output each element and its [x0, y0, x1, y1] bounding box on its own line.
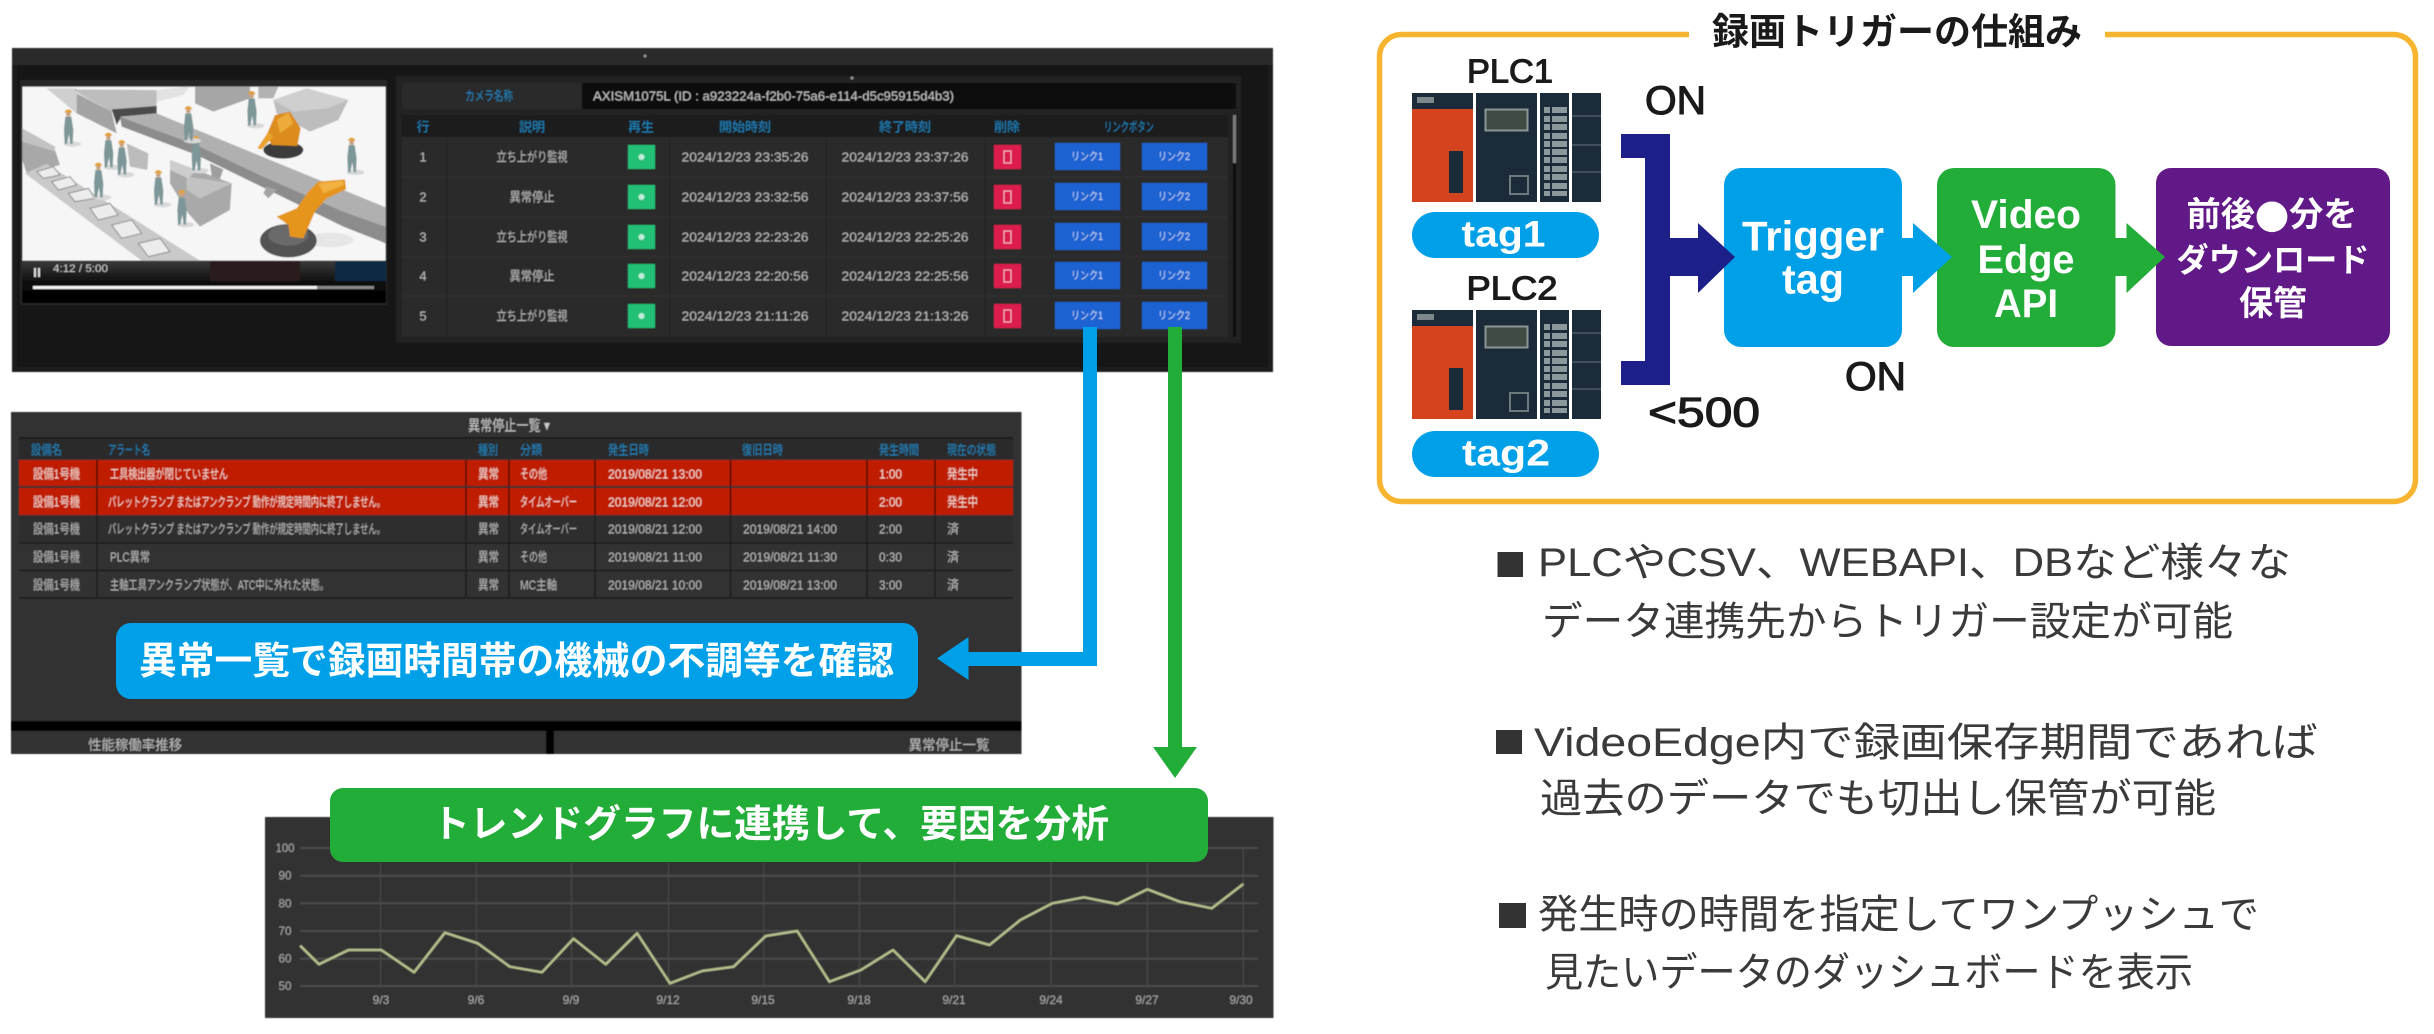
alarm row 3: 設備1号機 [33, 522, 80, 536]
alarm row 5: MC主軸 [520, 578, 557, 592]
alarm row 2: 異常 [478, 494, 499, 510]
list header row: 発生時間 [879, 442, 919, 458]
PLC1 label: PLC1 [1467, 52, 1553, 90]
row 4: 4 [419, 268, 427, 284]
x axis labels: 9/15 [751, 993, 775, 1007]
row 3 [419, 223, 1207, 250]
Trigger tag box: Trigger [1742, 212, 1884, 260]
y axis labels: 50 [278, 979, 292, 993]
alarm row 2: 2:00 [879, 494, 902, 510]
alarm row 3: 異常 [478, 522, 499, 536]
alarm row 2: タイムオーバー [520, 494, 577, 510]
y axis labels: 100 [276, 841, 295, 855]
list header row: 復旧日時 [742, 442, 783, 458]
row 3: 2024/12/23 22:25:26 [842, 230, 968, 244]
alarm row 5: 2019/08/21 13:00 [743, 578, 837, 592]
video player [20, 80, 387, 305]
list title: 異常停止一覧 ▾ [468, 418, 550, 434]
alarm row 4: 2019/08/21 11:00 [608, 550, 702, 564]
row 5: リンク1 [1071, 309, 1103, 322]
row 4: リンク1 [1071, 269, 1103, 282]
y axis labels: 70 [278, 924, 292, 938]
alarm row 3: 2:00 [879, 522, 902, 536]
x axis labels: 9/18 [847, 993, 871, 1007]
list header row [19, 439, 1013, 459]
alarm row 1: その他 [520, 466, 547, 482]
row 5: 立ち上がり監視 [496, 308, 568, 324]
alarm row 3: 2019/08/21 14:00 [743, 522, 837, 536]
alarm row 1: 工具検出器が閉じていません [110, 466, 228, 482]
alarm row 5: 主軸工具アンクランプ状態が、ATC中に外れた状態。 [110, 578, 329, 592]
alarm row 1: 異常 [478, 466, 499, 482]
y axis labels: 90 [278, 869, 292, 883]
Trigger tag box: tag [1782, 256, 1844, 302]
list header row: 設備名 [31, 442, 62, 458]
download box: 前後●分を [2186, 190, 2358, 240]
row 2: 異常停止 [510, 190, 554, 204]
panel: abnormal stop list screen [11, 412, 1022, 754]
list header row: 現在の状態 [947, 442, 996, 458]
bullet 3 [1499, 893, 2259, 995]
alarm row 3 [19, 516, 1013, 598]
alarm row 1: 設備1号機 [33, 466, 80, 482]
tag1 pill [1412, 212, 1599, 258]
x axis labels: 9/30 [1229, 993, 1253, 1007]
alarm row 5 [19, 570, 1013, 598]
x axis labels: 9/24 [1039, 993, 1063, 1007]
alarm row 4: 済 [947, 550, 959, 564]
row 2: リンク1 [1071, 190, 1103, 203]
alarm row 4: 設備1号機 [33, 550, 80, 564]
alarm row 3: パレットクランプ またはアンクランプ 動作が規定時間内に終了しません。 [108, 522, 385, 536]
row 3: リンク2 [1158, 230, 1190, 243]
bullet 1 [1498, 541, 2291, 644]
video controls [22, 261, 386, 303]
alarm row 4: 異常 [478, 550, 499, 564]
row 4: 2024/12/23 22:25:56 [842, 268, 968, 284]
row 1: リンク1 [1071, 150, 1103, 163]
row 3: リンク1 [1071, 230, 1103, 243]
download box [2156, 168, 2390, 346]
alarm row 1: 1:00 [879, 466, 902, 482]
row 1: リンク2 [1158, 150, 1190, 163]
Video Edge API box: Edge [1978, 238, 2074, 282]
alarm row 1: 発生中 [947, 466, 978, 482]
connector: green line and arrow to trend graph [1153, 327, 1197, 778]
row 4: 異常停止 [510, 268, 554, 284]
x axis labels: 9/21 [942, 993, 966, 1007]
alarm row 4 [33, 550, 959, 564]
download box: 保管 [2239, 285, 2307, 323]
bottom tabs: 性能稼働率推移 [88, 737, 182, 753]
row 5 [419, 302, 1207, 329]
list header row: 発生日時 [608, 442, 649, 458]
row 2: 2024/12/23 23:32:56 [682, 190, 808, 204]
row 1 [419, 143, 1207, 170]
table header: リンクボタン [1104, 120, 1154, 134]
ON label bottom: ON [1845, 355, 1906, 399]
alarm row 2 [19, 488, 1013, 515]
row 3: 2024/12/23 22:23:26 [682, 230, 808, 244]
alarm row 4: 0:30 [879, 550, 902, 564]
x axis labels: 9/6 [468, 993, 485, 1007]
arrow: bracket to trigger [1621, 134, 1735, 385]
video controls: 4:12 / 5:00 [53, 263, 108, 275]
alarm row 3: 2019/08/21 12:00 [608, 522, 702, 536]
row 1: 2024/12/23 23:35:26 [682, 150, 808, 164]
row 2: リンク2 [1158, 190, 1190, 203]
callout: abnormal list [116, 623, 918, 699]
factory illustration [22, 87, 386, 261]
tag2 pill [1412, 431, 1599, 477]
table header [402, 115, 1228, 137]
alarm row 5: 設備1号機 [33, 578, 80, 592]
table header: 行 [416, 120, 430, 134]
arrow: trigger to API [1902, 223, 1952, 293]
bullet 3: 見たいデータのダッシュボードを表示 [1545, 951, 2193, 995]
camera name row [402, 83, 1236, 109]
x axis labels: 9/9 [563, 993, 580, 1007]
row 5: 2024/12/23 21:13:26 [842, 308, 968, 324]
row 4: リンク2 [1158, 269, 1190, 282]
panel: recording trigger mechanism [1380, 12, 2416, 502]
row 2: 2024/12/23 23:37:56 [842, 190, 968, 204]
camera name row: AXISM1075L (ID : a923224a-f2b0-75a6-e114-d5c95915d4b3) [593, 88, 954, 104]
alarm row 1: 2019/08/21 13:00 [608, 466, 702, 482]
tag1 pill: tag1 [1462, 214, 1546, 254]
bullet 3: 発生時の時間を指定してワンプッシュで [1538, 893, 2259, 937]
alarm row 2: 2019/08/21 12:00 [608, 494, 702, 510]
alarm row 3: 済 [947, 522, 959, 536]
alarm row 2: パレットクランプ またはアンクランプ 動作が規定時間内に終了しません。 [108, 494, 385, 510]
bullet 2 [1496, 721, 2318, 821]
table header: 開始時刻 [719, 120, 771, 134]
row 5: リンク2 [1158, 309, 1190, 322]
alarm row 5: 済 [947, 578, 959, 592]
row 5: 5 [419, 308, 427, 324]
panel: trend graph [265, 817, 1274, 1018]
alarm row 1 [19, 460, 1013, 486]
arrow: API to download [2115, 223, 2165, 293]
row 1: 立ち上がり監視 [496, 150, 568, 164]
table header: 説明 [519, 120, 545, 134]
alarm row 4: その他 [520, 550, 547, 564]
Video Edge API box [1937, 168, 2116, 347]
list header row: 種別 [478, 442, 498, 458]
Video Edge API box: Video [1971, 193, 2081, 237]
tag2 pill: tag2 [1462, 432, 1550, 474]
download box: ダウンロード [2176, 242, 2370, 278]
bottom tabs: 異常停止一覧 [908, 737, 990, 753]
list header row: 分類 [520, 442, 542, 458]
bullet 2: 過去のデータでも切出し保管が可能 [1540, 777, 2216, 821]
bullet 2: VideoEdge内で録画保存期間であれば [1534, 721, 2318, 765]
row 4: 2024/12/23 22:20:56 [682, 268, 808, 284]
alarm row 4: 2019/08/21 11:30 [743, 550, 837, 564]
y axis labels: 80 [278, 896, 292, 910]
alarm row 2: 発生中 [947, 494, 978, 510]
alarm row 5: 異常 [478, 578, 499, 592]
Video Edge API box: API [1994, 282, 2058, 326]
row 1: 1 [419, 150, 427, 164]
bullet 1: PLCやCSV、WEBAPI、DBなど様々な [1538, 541, 2291, 585]
alarm row 4: PLC異常 [110, 550, 150, 564]
table header: 終了時刻 [879, 120, 931, 134]
x axis labels: 9/3 [373, 993, 390, 1007]
icon: PLC2 unit [1412, 310, 1601, 419]
alarm row 3: タイムオーバー [520, 522, 577, 536]
alarm row 5: 2019/08/21 10:00 [608, 578, 702, 592]
ON label top: ON [1645, 79, 1706, 123]
connector: blue line and arrow to abnormal list [937, 327, 1097, 680]
bullet 1: データ連携先からトリガー設定が可能 [1542, 600, 2233, 644]
row 2 [419, 183, 1207, 210]
x axis labels: 9/27 [1135, 993, 1159, 1007]
panel: video recording list screen [12, 48, 1273, 372]
recording list table [396, 76, 1241, 343]
callout: trend graph: トレンドグラフに連携して、要因を分析 [432, 804, 1109, 846]
PLC2 label: PLC2 [1466, 270, 1558, 306]
x axis labels [373, 993, 1253, 1007]
camera name row: カメラ名称 [465, 88, 513, 104]
scrollbar [1233, 115, 1236, 337]
table header: 再生 [628, 120, 654, 134]
list header row: アラート名 [108, 442, 150, 458]
callout: abnormal list: 異常一覧で録画時間帯の機械の不調等を確認 [139, 641, 894, 683]
threshold label: <500 [1648, 388, 1760, 436]
icon: PLC1 unit [1412, 93, 1601, 202]
alarm row 5: 3:00 [879, 578, 902, 592]
trend line [300, 884, 1243, 983]
row 3: 立ち上がり監視 [496, 230, 568, 244]
row 4 [419, 262, 1207, 289]
x axis labels: 9/12 [656, 993, 680, 1007]
bottom tabs [11, 721, 1022, 754]
heading: 録画トリガーの仕組み [1712, 12, 2082, 52]
callout: trend graph [330, 788, 1208, 862]
row 3: 3 [419, 230, 427, 244]
alarm row 2: 設備1号機 [33, 494, 80, 510]
Trigger tag box [1724, 168, 1902, 347]
row 5: 2024/12/23 21:11:26 [682, 308, 808, 324]
row 1: 2024/12/23 23:37:26 [842, 150, 968, 164]
y axis labels: 60 [278, 952, 292, 966]
row 2: 2 [419, 190, 427, 204]
table header: 削除 [994, 120, 1020, 134]
y axis labels [276, 841, 295, 993]
